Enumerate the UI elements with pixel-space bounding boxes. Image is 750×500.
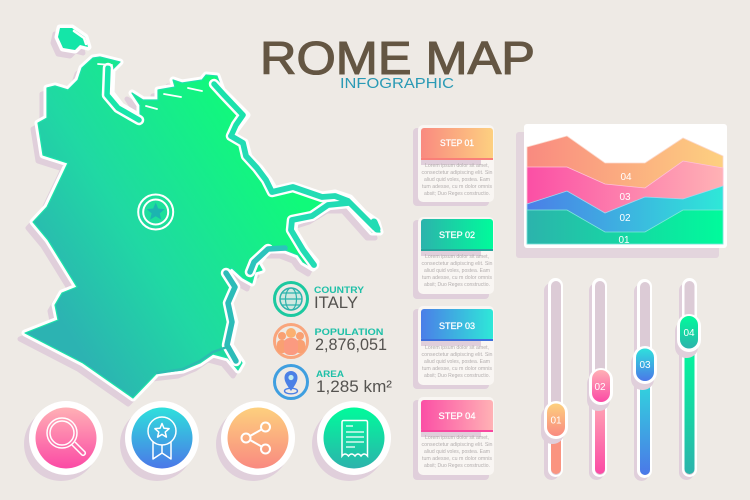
panel: step 03: tum adesse, cu m dolor omnis (422, 366, 493, 372)
button: award (120, 401, 199, 481)
area chart panel: 03 (619, 192, 631, 203)
subtitle: INFOGRAPHIC (340, 75, 454, 92)
area chart panel: 04 (620, 172, 632, 183)
panel: step 03 (413, 306, 494, 389)
button: search (24, 401, 103, 481)
panel: step 03: aliud quid voles, postea. Eam (424, 359, 490, 365)
panel: step 04 (413, 397, 494, 480)
info: area: 1,285 km² (316, 377, 392, 396)
panel: step 02: aliud quid voles, postea. Eam (424, 268, 490, 274)
icon: map star marker (138, 194, 173, 230)
panel: step 01: STEP 01 (440, 138, 474, 148)
info: area (274, 366, 392, 398)
slider 04: 04 (683, 328, 695, 339)
info: population: 2,876,051 (315, 335, 387, 354)
slider 04 (675, 278, 701, 480)
slider 01: 01 (550, 416, 562, 426)
panel: step 03: absit; Duo Reges constructio. (424, 373, 490, 379)
panel: step 04: STEP 04 (438, 411, 476, 421)
panel: step 01: consectetur adipiscing elit. Sin (422, 170, 493, 176)
panel: step 01: Lorem ipsum dolor sit amet, (425, 163, 489, 169)
map of Rome (20, 28, 380, 404)
panel: step 02: STEP 02 (439, 230, 475, 240)
panel: step 03: Lorem ipsum dolor sit amet, (425, 345, 489, 351)
slider 03 (631, 279, 657, 481)
panel: step 02: consectetur adipiscing elit. Sin (422, 261, 493, 267)
panel: step 04: Lorem ipsum dolor sit amet, (425, 435, 489, 441)
area chart panel (516, 124, 727, 258)
panel: step 04: consectetur adipiscing elit. Sin (422, 442, 493, 448)
panel: step 04: absit; Duo Reges constructio. (424, 463, 490, 469)
panel: step 01 (413, 125, 494, 206)
panel: step 03: consectetur adipiscing elit. Sin (422, 352, 493, 358)
panel: step 04: tum adesse, cu m dolor omnis (422, 456, 493, 462)
info: population: POPULATION (314, 327, 384, 338)
panel: step 03: STEP 03 (439, 321, 475, 331)
panel: step 01: tum adesse, cu m dolor omnis (422, 184, 493, 190)
slider 03: 03 (639, 360, 651, 371)
title: ROME MAP (260, 32, 535, 84)
panel: step 02 (413, 217, 494, 299)
info: country (274, 282, 365, 316)
panel: step 01: aliud quid voles, postea. Eam (424, 177, 490, 183)
slider 02: 02 (594, 382, 606, 393)
panel: step 02: tum adesse, cu m dolor omnis (422, 275, 493, 281)
info: area: AREA (316, 369, 344, 380)
panel: step 04: aliud quid voles, postea. Eam (424, 449, 490, 455)
info: country: COUNTRY (314, 285, 365, 296)
info: country: ITALY (314, 293, 358, 312)
slider 02 (587, 278, 613, 480)
panel: step 02: Lorem ipsum dolor sit amet, (425, 254, 489, 260)
panel: step 01: absit; Duo Reges constructio. (424, 191, 490, 197)
area chart panel: 01 (618, 235, 630, 246)
panel: step 02: absit; Duo Reges constructio. (424, 282, 490, 288)
area chart panel: 02 (619, 213, 631, 224)
button: share (216, 401, 295, 481)
slider 01 (541, 278, 568, 480)
button: document (312, 401, 391, 481)
info: population (274, 324, 387, 358)
